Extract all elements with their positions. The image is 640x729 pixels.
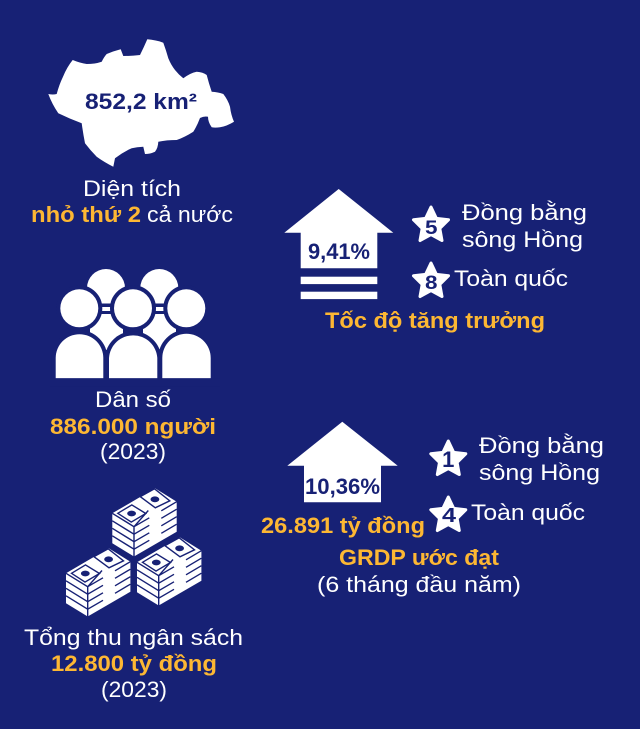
population value: 886.000 người — [50, 414, 216, 439]
GRDP amount: 26.891 tỷ đồng — [261, 513, 425, 538]
area rank: nhỏ thứ 2 — [31, 202, 141, 227]
GRDP heading: GRDP ước đạt — [339, 545, 500, 570]
population year: (2023) — [100, 439, 166, 464]
regional rank label: sông Hồng — [479, 460, 600, 485]
panel: budget revenue — [24, 488, 243, 702]
rank star: regional 1 — [431, 441, 466, 474]
regional rank label: Đồng bằng — [479, 433, 604, 458]
growth value: 9,41% — [308, 239, 370, 264]
rank star: regional 5 — [414, 207, 448, 240]
GRDP growth value: 10,36% — [305, 474, 380, 499]
area value: 852,2 km² — [85, 89, 197, 114]
rank star: national 8: 8 — [425, 273, 438, 294]
regional rank label: sông Hồng — [462, 227, 583, 252]
panel: population — [50, 269, 220, 464]
regional rank label — [479, 433, 604, 485]
regional rank label — [462, 200, 587, 252]
regional rank label: Đồng bằng — [462, 200, 587, 225]
icon: up arrow with bars — [284, 189, 393, 299]
icon: money stacks — [66, 488, 201, 616]
rank star: national 4: 4 — [442, 505, 457, 527]
rank star: national 4 — [431, 497, 466, 530]
panel: growth rate — [284, 189, 587, 333]
area rank — [31, 202, 233, 227]
population label: Dân số — [95, 387, 171, 412]
GRDP period: (6 tháng đầu năm) — [317, 572, 521, 597]
rank star: regional 5: 5 — [425, 218, 438, 239]
map silhouette — [48, 39, 234, 167]
icon: people group — [50, 269, 220, 386]
national rank label: Toàn quốc — [471, 500, 585, 525]
rank star: regional 1: 1 — [442, 447, 454, 472]
budget year: (2023) — [101, 677, 167, 702]
budget label: Tổng thu ngân sách — [24, 625, 243, 650]
area label: Diện tích — [83, 176, 181, 201]
national rank label: Toàn quốc — [454, 266, 568, 291]
growth heading: Tốc độ tăng trưởng — [325, 308, 545, 333]
panel: area — [31, 39, 234, 227]
area rank: cả nước — [147, 202, 233, 227]
budget value: 12.800 tỷ đồng — [51, 651, 217, 676]
rank star: national 8 — [414, 263, 448, 296]
panel: GRDP — [261, 422, 604, 597]
icon: up arrow — [287, 422, 398, 502]
